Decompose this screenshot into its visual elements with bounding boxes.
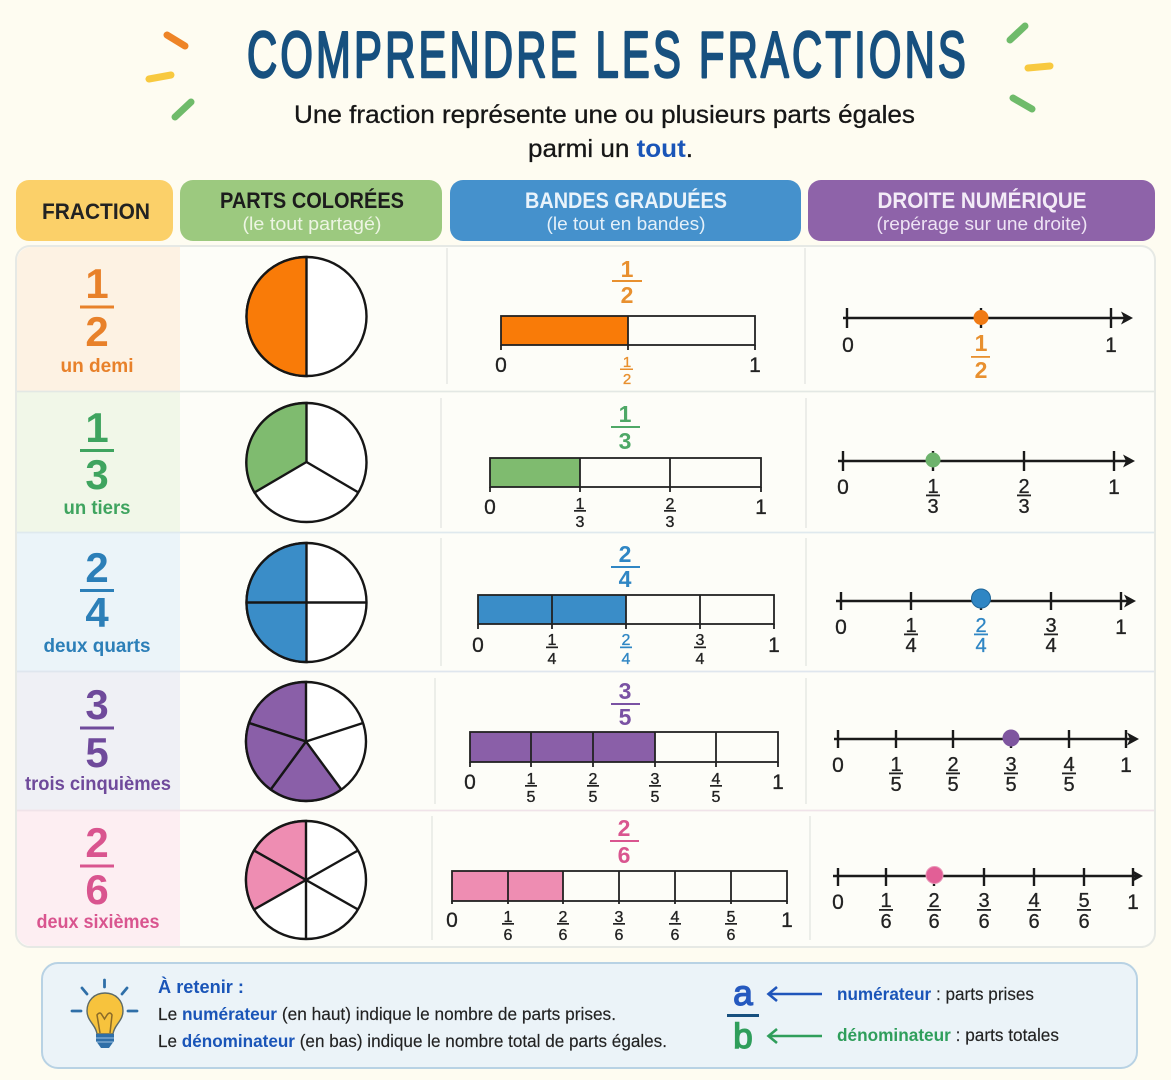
row 4: number line: 5 — [947, 774, 959, 796]
legend: a over b fraction — [727, 974, 759, 1056]
row 2: band fraction — [611, 401, 640, 454]
legend text: denominateur: dénominateur : parts totales — [837, 1025, 1059, 1045]
row 3: band: 3 — [696, 632, 705, 649]
row 4: fraction three fifths — [25, 681, 171, 795]
row 3: band fraction — [611, 541, 640, 592]
header: parts colorees — [180, 180, 442, 241]
legend text: numerateur: numérateur : parts prises — [837, 984, 1034, 1004]
subtitle: Une fraction représente une ou plusieurs parts égales — [294, 101, 915, 129]
row 5: band: 4 — [671, 909, 680, 926]
row 3: fraction two quarters: 4 — [85, 589, 109, 636]
row 4: band fraction: 3 — [619, 678, 631, 704]
row 3: band: 1 — [548, 632, 557, 649]
row 3: number line — [835, 589, 1136, 657]
row 5: fraction two sixths: 6 — [85, 866, 109, 913]
row 2: number line: 3 — [1018, 496, 1030, 518]
header: droite numerique: DROITE NUMÉRIQUE — [878, 188, 1086, 213]
arrow: to numerator — [768, 987, 822, 1001]
row 4: band: 5 — [527, 789, 536, 806]
row 4: number line: 3 — [1005, 754, 1017, 776]
row 3: number line: 1 — [1115, 616, 1127, 639]
row 2: band fraction: 1 — [619, 401, 632, 427]
header: fraction: FRACTION — [42, 199, 150, 224]
row 5: number line: 0 — [832, 891, 844, 914]
row 2: number line: 1 — [927, 476, 939, 498]
row 5: circle — [246, 821, 366, 939]
row 3: number line: 2 — [975, 615, 987, 637]
header: fraction — [16, 180, 173, 241]
row 2: band fraction: 3 — [619, 428, 631, 454]
row 4: band: 1 — [527, 771, 536, 788]
row 5: number line: 5 — [1078, 890, 1090, 912]
row 5: number line: 2 — [928, 890, 940, 912]
row 5: number line: 6 — [978, 911, 990, 933]
row 1: band: 0 — [495, 354, 507, 377]
row 1: fraction one half — [60, 260, 134, 377]
row 5: fraction two sixths: 2 — [85, 819, 109, 866]
row 3: band: 2 — [622, 632, 631, 649]
row 5: band fraction: 6 — [618, 842, 630, 868]
row 3: band: 1 — [768, 634, 780, 657]
row 5: band: 6 — [504, 927, 513, 944]
row 4: band: 5 — [651, 789, 660, 806]
row 5: number line: 4 — [1028, 890, 1040, 912]
row 5: number line: 6 — [1028, 911, 1040, 933]
row 4: band: 5 — [712, 789, 721, 806]
row 5: band: 6 — [671, 927, 680, 944]
row 4: band fraction: 5 — [619, 704, 632, 730]
row 3: fraction two quarters: deux quarts — [44, 636, 150, 657]
subtitle — [294, 101, 915, 163]
row 1: number line: 1 — [975, 330, 988, 356]
row 4: number line: 4 — [1063, 754, 1075, 776]
row 5: band: 1 — [504, 909, 513, 926]
row 5: band: 5 — [727, 909, 736, 926]
row 5: number line — [832, 866, 1143, 933]
row 2: number line — [837, 451, 1135, 518]
header: parts colorees: PARTS COLORÉES — [220, 188, 404, 213]
row 1: number line — [842, 308, 1133, 383]
row 4: fraction three fifths: 5 — [85, 729, 109, 776]
row 3: number line: 3 — [1045, 615, 1057, 637]
row 2: number line: 2 — [1018, 476, 1030, 498]
row 3: band: 0 — [472, 634, 484, 657]
row 5: band: 0 — [446, 909, 458, 932]
row 5: band: 6 — [559, 927, 568, 944]
row 1: band fraction: 1 — [621, 256, 634, 282]
row 3: fraction two quarters — [44, 544, 150, 657]
row 5: band — [446, 871, 793, 944]
row 5: number line: 6 — [1078, 911, 1090, 933]
row 5: band fraction — [610, 815, 639, 868]
row 2: number line: 3 — [927, 496, 939, 518]
row 2: band: 3 — [576, 514, 585, 531]
row 2: fraction one third: 1 — [85, 404, 109, 451]
row 4: band: 0 — [464, 771, 476, 794]
row 2: band — [484, 458, 767, 531]
row 5: number line: 6 — [928, 911, 940, 933]
row 4: band: 3 — [651, 771, 660, 788]
row 2: number line: 0 — [837, 476, 849, 499]
callout text: numerateur: Le numérateur (en haut) indique le nombre de parts prises. — [158, 1004, 616, 1024]
row 2: band: 0 — [484, 496, 496, 519]
row 1: number line: 2 — [975, 357, 987, 383]
row 4: band: 1 — [772, 771, 784, 794]
row 2: number line: 1 — [1108, 476, 1120, 499]
row 5: number line: 3 — [978, 890, 990, 912]
row 3: number line: 4 — [1045, 635, 1057, 657]
row 2: band: 1 — [576, 496, 585, 513]
callout heading: À retenir : — [158, 976, 244, 997]
row 3: band fraction: 4 — [619, 566, 632, 592]
row 4: band: 5 — [589, 789, 598, 806]
row 4: number line: 0 — [832, 754, 844, 777]
row 3: band — [472, 595, 780, 668]
row 3: number line: 1 — [905, 615, 917, 637]
row 3: band: 4 — [622, 651, 631, 668]
row 5: band: 6 — [615, 927, 624, 944]
row 2: band: 2 — [666, 496, 675, 513]
header: droite numerique: (repérage sur une droite) — [876, 214, 1088, 234]
row 1: band: 1 — [749, 354, 761, 377]
row 1: number line: 1 — [1105, 334, 1117, 357]
decoration: left confetti — [149, 35, 191, 117]
row 3: band fraction: 2 — [619, 541, 631, 567]
row 4: number line: 2 — [947, 754, 959, 776]
row 2: band: 3 — [666, 514, 675, 531]
row 4: number line: 5 — [890, 774, 902, 796]
row 2: fraction one third — [64, 404, 130, 519]
row 4: fraction three fifths: trois cinquièmes — [25, 774, 171, 795]
row 4: band — [464, 732, 784, 806]
row 1: fraction one half: un demi — [60, 356, 134, 377]
callout: a retenir panel — [42, 963, 1137, 1068]
subtitle: parmi un tout. — [528, 135, 693, 163]
row 1: band — [495, 316, 761, 388]
row 2: fraction one third: 3 — [85, 451, 109, 498]
row 5: band fraction: 2 — [618, 815, 630, 841]
row 3: fraction two quarters: 2 — [85, 544, 109, 591]
row 1: band fraction — [612, 256, 642, 308]
decoration: right confetti — [1010, 26, 1050, 109]
arrow: to denominator — [768, 1029, 822, 1043]
header: bandes graduees: (le tout en bandes) — [546, 214, 706, 234]
row 4: number line — [832, 730, 1139, 796]
row 4: fraction three fifths: 3 — [85, 681, 109, 728]
row 3: band: 4 — [548, 651, 557, 668]
row 5: band: 1 — [781, 909, 793, 932]
row 3: number line: 4 — [905, 635, 917, 657]
table panel — [16, 246, 1155, 947]
row 5: band: 2 — [559, 909, 568, 926]
row 5: fraction two sixths — [36, 819, 160, 933]
row 3: band: 4 — [696, 651, 705, 668]
row 5: fraction two sixths: deux sixièmes — [36, 912, 160, 933]
row 4: band: 2 — [589, 771, 598, 788]
header: bandes graduees — [450, 180, 801, 241]
row 1: fraction one half: 1 — [85, 260, 109, 307]
row 5: band: 6 — [727, 927, 736, 944]
row 1: band fraction: 2 — [621, 282, 633, 308]
row 3: number line: 4 — [975, 635, 987, 657]
row 4: number line: 5 — [1063, 774, 1075, 796]
row 1: number line: 0 — [842, 334, 854, 357]
row 4: number line: 5 — [1005, 774, 1017, 796]
callout text: denominateur: Le dénominateur (en bas) indique le nombre total de parts égales. — [158, 1031, 667, 1051]
header: droite numerique — [808, 180, 1155, 241]
row 5: band: 3 — [615, 909, 624, 926]
row 4: band: 4 — [712, 771, 721, 788]
row 4: number line: 1 — [1120, 754, 1132, 777]
row 2: fraction one third: un tiers — [64, 498, 130, 519]
legend: a over b fraction: b — [733, 1017, 753, 1056]
row 1: circle — [246, 257, 366, 376]
row 3: circle — [246, 543, 366, 662]
row 2: circle — [246, 403, 366, 522]
row 1: fraction one half: 2 — [85, 308, 109, 355]
row 1: band: 1 — [623, 354, 631, 371]
row 5: number line: 1 — [880, 890, 892, 912]
header: parts colorees: (le tout partagé) — [242, 214, 382, 234]
row 4: number line: 1 — [890, 754, 902, 776]
header: bandes graduees: BANDES GRADUÉES — [525, 188, 727, 213]
legend: a over b fraction: a — [733, 974, 753, 1013]
row 5: number line: 1 — [1127, 891, 1139, 914]
row 5: number line: 6 — [880, 911, 892, 933]
row 3: number line: 0 — [835, 616, 847, 639]
icon: light bulb — [72, 980, 137, 1048]
row 4: band fraction — [611, 678, 640, 730]
row 4: circle — [246, 682, 366, 801]
row 2: band: 1 — [755, 496, 767, 519]
row 1: band: 2 — [623, 371, 631, 388]
